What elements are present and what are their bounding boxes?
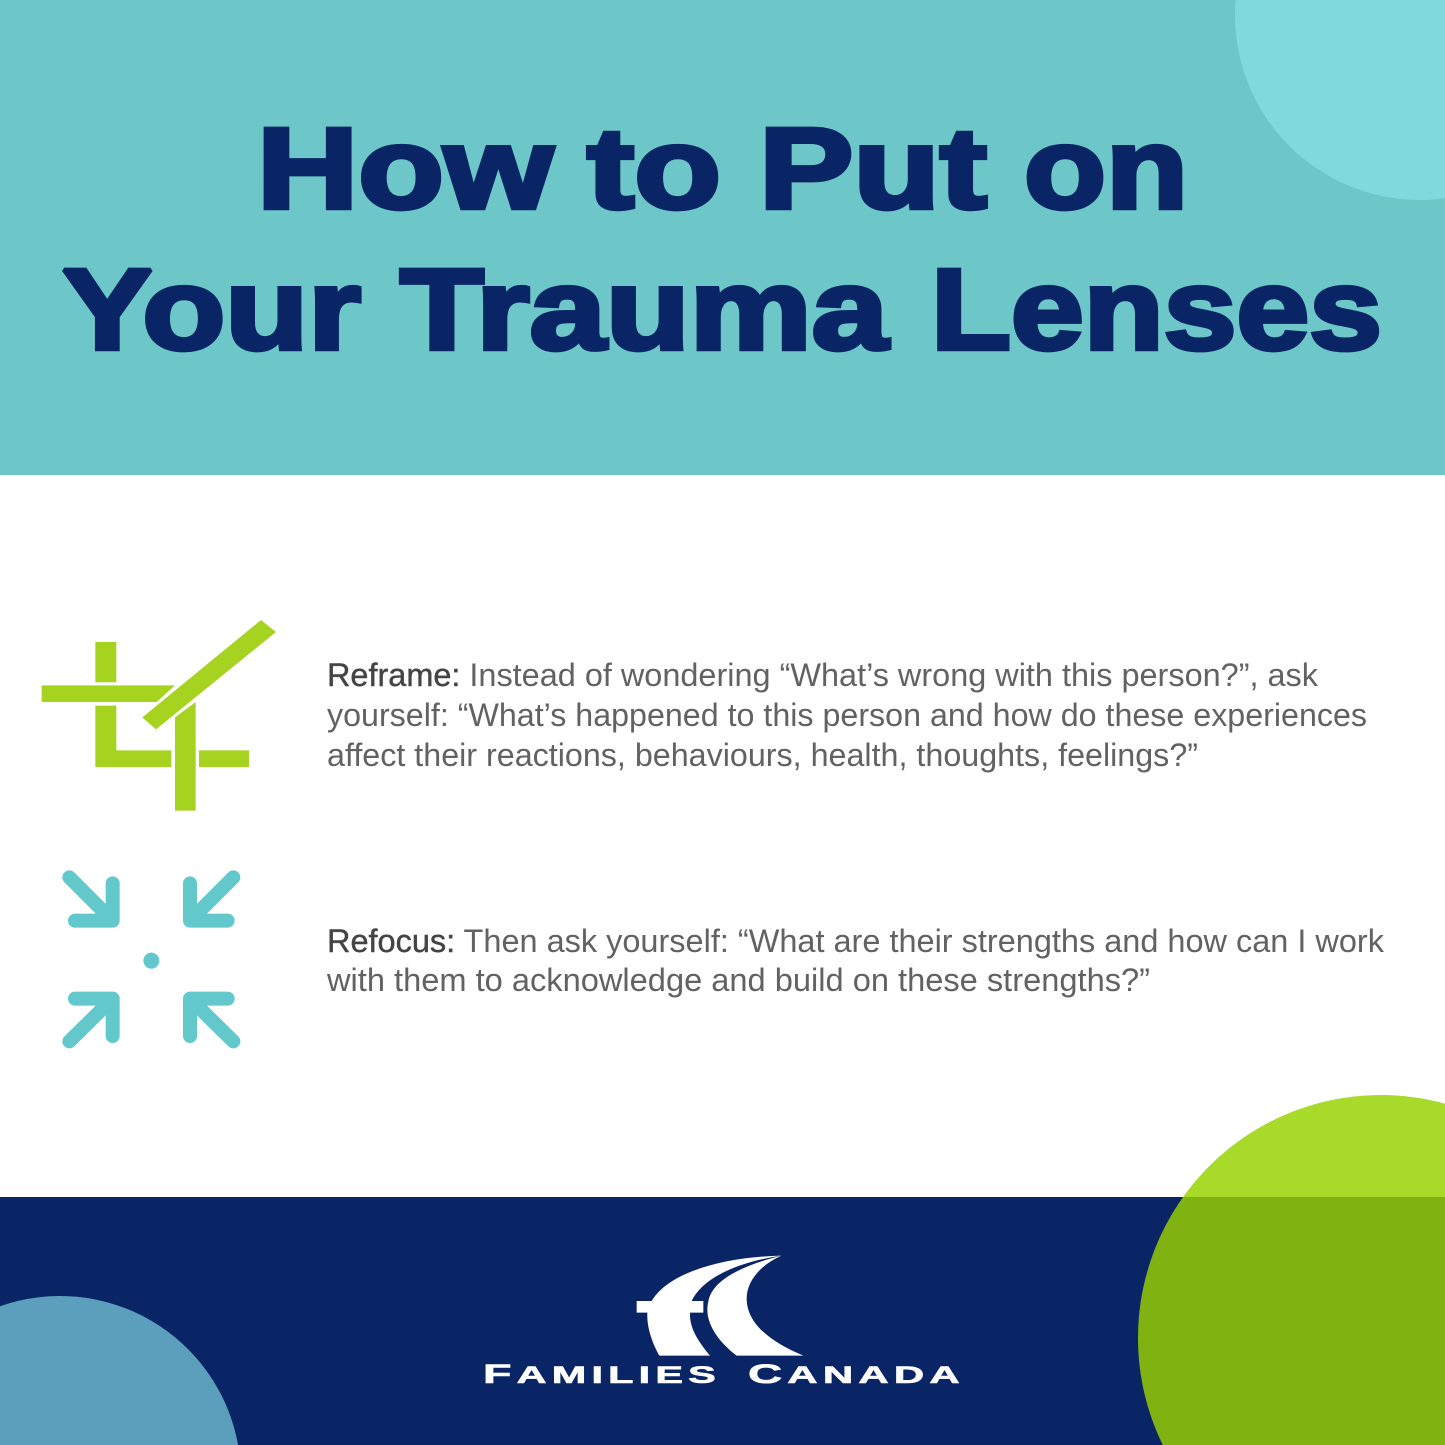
text block: reframe [327,657,1367,773]
logo wordmark: F AMILIES [483,1359,721,1389]
header band [0,0,1445,475]
text block: refocus: Refocus: Then ask yourself: “What are their strengths and how can I work [327,923,1385,959]
title: Put [759,105,987,233]
text block: refocus [326,923,1385,998]
text block: reframe: yourself: “What’s happened to this person and how do these experiences [327,697,1367,733]
logo wordmark: C ANADA [748,1359,965,1389]
decorative circle: bottom right [1138,1095,1445,1445]
logo mark [637,1256,803,1356]
title: Trauma [400,246,889,374]
decorative circle: bottom left [0,1296,238,1445]
logo: Families Canada [483,1256,965,1389]
title: to [587,105,721,233]
icon: refocus arrows [69,877,233,1041]
text block: refocus: with them to acknowledge and build on these strengths?” [326,962,1150,998]
text block: reframe: Reframe: Instead of wondering “What’s wrong with this person?”, ask [327,657,1319,693]
decorative circle: top right [1235,0,1445,200]
logo wordmark [483,1359,965,1389]
icon: reframe crop tool [42,620,276,811]
title: Lenses [931,246,1382,374]
title [62,105,1382,374]
title: Your [62,246,361,374]
title: on [1024,105,1188,233]
text block: reframe: affect their reactions, behaviours, health, thoughts, feelings?” [327,737,1198,773]
title: How [257,105,554,233]
footer band [0,1197,1445,1445]
